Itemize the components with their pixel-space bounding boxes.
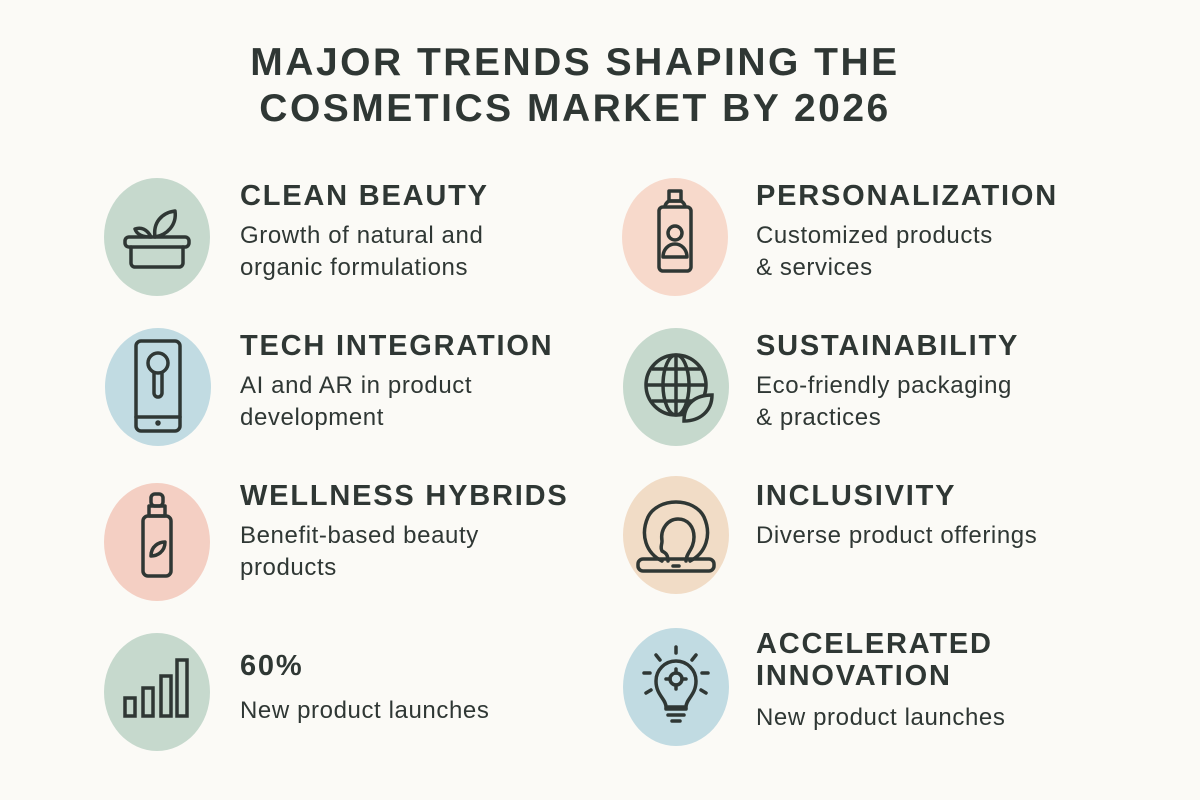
item: wellness hybrids: products	[240, 554, 337, 581]
icon: serum bottle	[104, 483, 210, 601]
item: personalization	[756, 180, 1058, 281]
item: clean beauty: organic formulations	[240, 254, 468, 281]
item: clean beauty: CLEAN BEAUTY	[240, 180, 489, 212]
title: MAJOR TRENDS SHAPING THE	[250, 41, 900, 84]
title: COSMETICS MARKET BY 2026	[259, 87, 891, 130]
item: 60%	[240, 650, 489, 724]
item: wellness hybrids: WELLNESS HYBRIDS	[240, 480, 568, 512]
item: tech integration: AI and AR in product	[240, 372, 472, 399]
item: accelerated innovation: INNOVATION	[756, 660, 952, 692]
item: wellness hybrids: Benefit-based beauty	[240, 522, 479, 549]
item: tech integration: development	[240, 404, 384, 431]
item: inclusivity: INCLUSIVITY	[756, 480, 956, 512]
item: wellness hybrids	[240, 480, 568, 581]
item: clean beauty: Growth of natural and	[240, 222, 483, 249]
icon: bottle with person	[622, 178, 728, 296]
item: sustainability	[756, 330, 1019, 431]
item: inclusivity: Diverse product offerings	[756, 522, 1037, 549]
icon: bar chart	[104, 633, 210, 751]
item: sustainability: SUSTAINABILITY	[756, 330, 1019, 362]
item: personalization: & services	[756, 254, 873, 281]
item: personalization: Customized products	[756, 222, 993, 249]
icon: plant pot	[104, 178, 210, 296]
item: clean beauty	[240, 180, 489, 281]
item: accelerated innovation: New product launches	[756, 704, 1005, 731]
item: sustainability: & practices	[756, 404, 881, 431]
icon: globe leaf	[623, 328, 729, 446]
item: inclusivity	[756, 480, 1037, 549]
item: tech integration	[240, 330, 553, 431]
item: accelerated innovation: ACCELERATED	[756, 628, 993, 660]
icon: phone	[105, 328, 211, 446]
item: accelerated innovation	[756, 628, 1005, 731]
icon: lightbulb	[623, 628, 729, 746]
item: personalization: PERSONALIZATION	[756, 180, 1058, 212]
icon: mirror head	[623, 476, 729, 594]
item: sustainability: Eco-friendly packaging	[756, 372, 1012, 399]
item: 60%: New product launches	[240, 697, 489, 724]
item: 60%: 60%	[240, 650, 303, 682]
title	[250, 41, 900, 130]
item: tech integration: TECH INTEGRATION	[240, 330, 553, 362]
